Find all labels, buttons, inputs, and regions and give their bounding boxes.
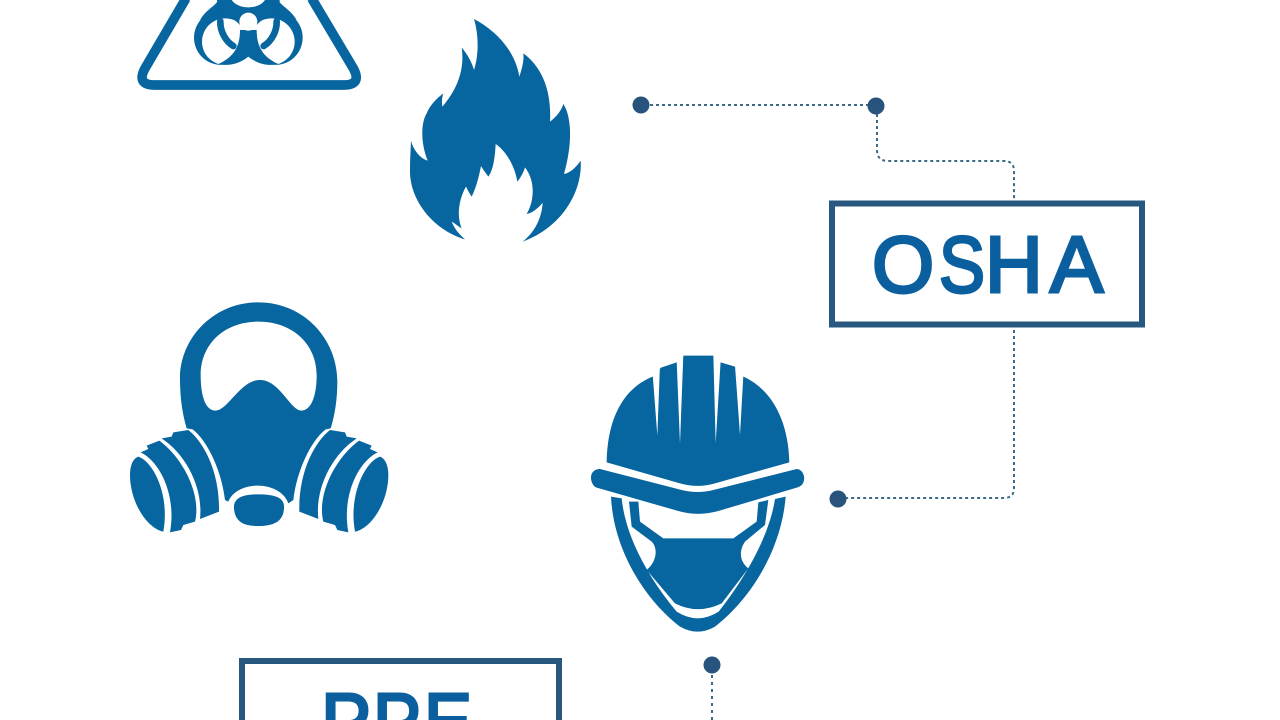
label box: PPE <box>239 658 562 720</box>
connector: hard hat dot <box>830 490 846 508</box>
connector: OSHA to hard hat line <box>846 330 1014 498</box>
icon: gas mask <box>130 302 388 532</box>
label box: OSHA: O <box>872 220 934 309</box>
icon: hard hat with face mask <box>591 354 804 632</box>
label box: OSHA: H <box>985 220 1043 309</box>
label box: OSHA: A <box>1050 220 1104 309</box>
connector: top flame line <box>650 105 1014 200</box>
label box: OSHA <box>832 204 1142 324</box>
icon: flame <box>410 19 581 242</box>
connector: bottom line <box>711 675 713 720</box>
connector: top elbow dot <box>868 98 884 114</box>
connector: bottom dot <box>704 656 720 674</box>
icon: biohazard warning triangle <box>142 0 356 85</box>
label box: OSHA: S <box>939 220 985 309</box>
connector: top start dot <box>632 96 650 114</box>
